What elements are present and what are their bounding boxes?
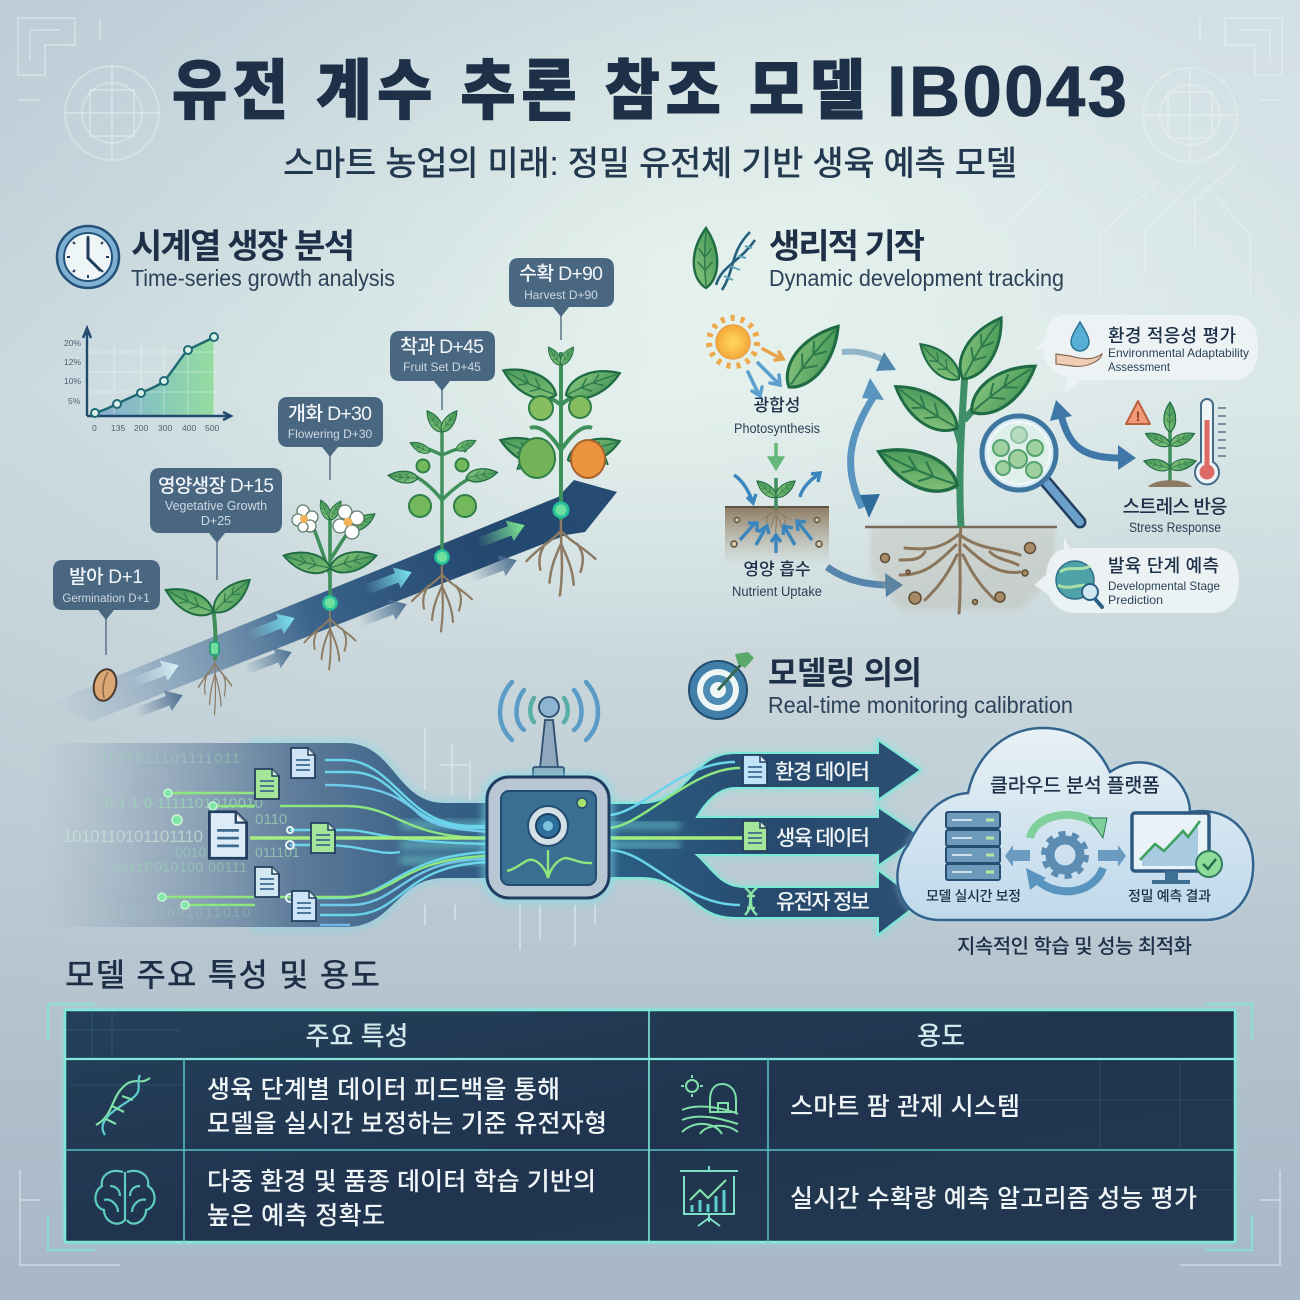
binary text stream: 011101 (255, 844, 300, 860)
callout: fruit set (390, 331, 495, 410)
label: growth data: 생육 데이터 (776, 827, 870, 850)
seedling D+15 (161, 573, 256, 714)
binary text stream: 0010 (175, 844, 206, 860)
fruit-set plant D+45 (388, 408, 499, 632)
callout: vegetative growth: 영양생장 D+15 (158, 475, 274, 497)
text: feature two: 높은 예측 정확도 (207, 1202, 385, 1230)
icon: presentation chart (680, 1166, 738, 1226)
chart: growth curve: 300 (158, 423, 172, 433)
callout: developmental stage prediction: Prediction (1108, 593, 1163, 607)
callout: vegetative growth: D+25 (201, 514, 231, 528)
data flow: right split arrows (605, 740, 921, 935)
label: nutrient uptake: Nutrient Uptake (732, 584, 822, 599)
callout: fruit set: Fruit Set D+45 (403, 360, 481, 374)
binary text stream (63, 750, 300, 920)
subtitle: 스마트 농업의 미래: 정밀 유전체 기반 생육 예측 모델 (283, 145, 1017, 183)
label: gene information (745, 888, 870, 915)
callout: environmental adaptability (1034, 315, 1258, 393)
callout: harvest: Harvest D+90 (524, 288, 598, 302)
callout: environmental adaptability: Environmental Adaptability (1108, 346, 1249, 360)
text: feature one (207, 1076, 607, 1138)
label: environment data (743, 755, 870, 785)
heading: time-series: 시계열 생장 분석 (131, 228, 355, 266)
callout: germination (53, 560, 160, 655)
icon: DNA (96, 1075, 150, 1135)
panel: physiological mechanism (694, 228, 1258, 613)
callout: germination: 발아 D+1 (69, 566, 143, 588)
panel: modelling significance heading (689, 652, 1073, 719)
label: gene information: 유전자 정보 (776, 891, 870, 914)
callout: harvest: 수확 D+90 (519, 263, 603, 285)
binary text stream: 0011P010100 00111 (112, 859, 247, 875)
text: feature two (207, 1168, 596, 1230)
icon: sun (709, 318, 757, 366)
binary text stream: 0 1 1 0 1111101010010 (105, 795, 263, 812)
english subheading: Dynamic development tracking (769, 265, 1064, 291)
icon: clock (57, 226, 119, 288)
callout: vegetative growth (150, 468, 282, 580)
callout: flowering: 개화 D+30 (288, 403, 372, 425)
flow lines (162, 760, 490, 925)
label: nutrient uptake (732, 560, 822, 599)
heading: mechanism: 생리적 기작 (769, 228, 925, 266)
data flow: left band (40, 743, 500, 927)
callout: harvest (509, 258, 614, 340)
section heading: model characteristics: 모델 주요 특성 및 용도 (65, 957, 380, 993)
callout: environmental adaptability: Assessment (1108, 360, 1171, 374)
binary text stream: 0110 (255, 811, 287, 828)
binary text stream: 1010110101101110 (63, 827, 203, 846)
cloud caption: 지속적인 학습 및 성능 최적화 (957, 935, 1192, 958)
title: IB0043 (887, 53, 1127, 132)
icon: leaf and DNA (694, 228, 755, 290)
panel: time-series growth analysis (50, 226, 624, 723)
central plant with roots (865, 310, 1057, 613)
english subheading: Real-time monitoring calibration (768, 692, 1073, 718)
label: stress response: 스트레스 반응 (1122, 496, 1228, 518)
arrow chevrons (128, 515, 529, 723)
binary text stream: 0101011101111011 (98, 750, 240, 766)
label: photosynthesis (734, 396, 820, 436)
icon: server rack (946, 812, 1000, 880)
arrow: growth timeline (50, 480, 617, 723)
label: photosynthesis: 광합성 (754, 396, 800, 415)
icon: seed (90, 667, 120, 703)
flowering plant D+30 (281, 498, 379, 670)
icon: farm with sun (681, 1075, 738, 1134)
curved flow arrows (827, 352, 1136, 597)
nutrient uptake illustration (725, 473, 829, 565)
text: use two: 실시간 수확량 예측 알고리즘 성능 평가 (790, 1185, 1197, 1213)
small light arrows (748, 349, 783, 396)
chart: growth curve (64, 328, 231, 433)
callout: flowering (278, 397, 383, 480)
chart: growth curve: 400 (182, 423, 196, 433)
callout: vegetative growth: Vegetative Growth (165, 499, 267, 513)
english subheading: Time-series growth analysis (131, 265, 395, 291)
callout: developmental stage prediction: Developmental Stage (1108, 579, 1220, 593)
text: feature one: 모델을 실시간 보정하는 기준 유전자형 (207, 1110, 607, 1138)
harvest plant D+90 (496, 344, 624, 596)
title: 유전 계수 추론 참조 모델 (172, 55, 865, 128)
chart: growth curve: 500 (205, 423, 219, 433)
table header: uses: 용도 (917, 1021, 965, 1051)
label: growth data (743, 821, 870, 851)
decorative circuit traces near device (425, 727, 595, 950)
icon: stress plant and thermometer (1126, 399, 1226, 487)
table header: key characteristics: 주요 특성 (306, 1021, 408, 1051)
chart: growth curve: 5% (68, 396, 81, 406)
label: environment data: 환경 데이터 (775, 761, 870, 784)
icon: sensor device (482, 682, 614, 904)
text: use one: 스마트 팜 관제 시스템 (790, 1093, 1020, 1121)
icon: brain (95, 1171, 155, 1224)
callout: fruit set: 착과 D+45 (400, 336, 484, 358)
heading: modelling: 모델링 의의 (768, 655, 922, 691)
chart: growth curve: 200 (134, 423, 148, 433)
arrow: green down (770, 443, 782, 468)
icon: target (689, 652, 754, 719)
cloud title: 클라우드 분석 플랫폼 (990, 775, 1160, 797)
callout: developmental stage prediction (1034, 538, 1239, 613)
callout: developmental stage prediction: 발육 단계 예측 (1108, 556, 1219, 576)
label: stress response: Stress Response (1129, 520, 1221, 535)
icon: leaf (777, 316, 849, 396)
icon: stress plant and thermometer: ! (1136, 408, 1140, 424)
document icons (209, 748, 335, 921)
icon: monitor with chart (1132, 813, 1222, 884)
panel: characteristics table (48, 1004, 1252, 1250)
binary text stream: 0100101001011010 (100, 904, 250, 920)
callout: environmental adaptability: 환경 적응성 평가 (1108, 326, 1236, 346)
chart: growth curve: 12% (64, 357, 81, 367)
text: feature two: 다중 환경 및 품종 데이터 학습 기반의 (207, 1168, 596, 1196)
label: prediction result: 정밀 예측 결과 (1128, 888, 1211, 904)
chart: growth curve: 10% (64, 376, 81, 386)
icon: sync loop with gear (1005, 815, 1126, 891)
label: nutrient uptake: 영양 흡수 (743, 560, 811, 579)
callout: germination: Germination D+1 (62, 593, 150, 605)
text: feature one: 생육 단계별 데이터 피드백을 통해 (207, 1076, 560, 1104)
label: stress response (1122, 496, 1228, 535)
chart: growth curve: 0 (92, 423, 97, 433)
chart: growth curve: 135 (111, 423, 125, 433)
cloud platform (897, 728, 1253, 920)
title (172, 53, 1127, 132)
label: real-time calibration: 모델 실시간 보정 (926, 888, 1021, 904)
callout: flowering: Flowering D+30 (288, 427, 373, 441)
label: photosynthesis: Photosynthesis (734, 421, 820, 436)
icon: magnifier (982, 416, 1080, 522)
chart: growth curve: 20% (64, 338, 81, 348)
